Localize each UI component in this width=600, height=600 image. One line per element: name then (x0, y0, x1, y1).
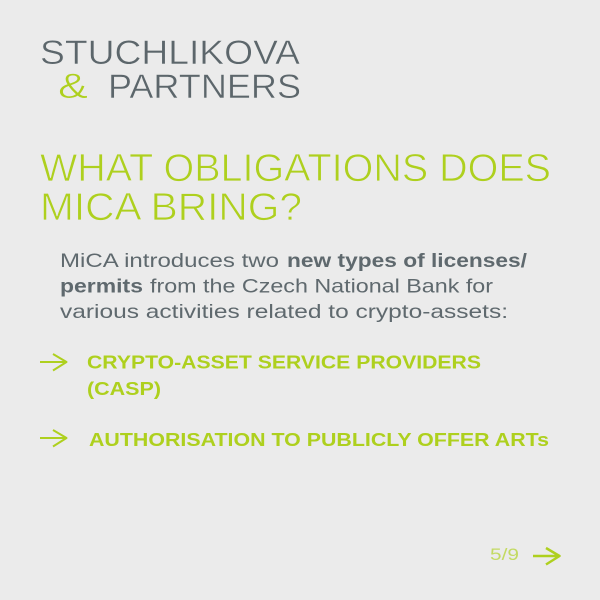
title (40, 147, 551, 229)
logo wordmark line one: STUCHLIKOVA (40, 34, 300, 72)
logo ampersand: & (58, 67, 88, 106)
title: WHAT OBLIGATIONS DOES (40, 147, 551, 190)
list item: CASP: (CASP) (87, 378, 161, 399)
logo wordmark line two: PARTNERS (108, 68, 301, 106)
title: MICA BRING? (40, 186, 302, 229)
page number: 5/9 (490, 545, 519, 564)
arrow: list item two (40, 430, 66, 446)
logo (40, 34, 301, 106)
list item: ARTs: AUTHORISATION TO PUBLICLY OFFER ARTs (89, 429, 549, 450)
intro paragraph: new types of licenses/ (287, 250, 528, 272)
intro paragraph: permits (60, 276, 143, 298)
intro paragraph (60, 250, 528, 323)
intro paragraph: from the Czech National Bank for (150, 276, 494, 298)
list item: CASP: CRYPTO-ASSET SERVICE PROVIDERS (87, 352, 481, 372)
arrow: next page (533, 548, 560, 564)
intro paragraph: MiCA introduces two (60, 250, 279, 272)
intro paragraph: various activities related to crypto-assets: (60, 301, 508, 323)
arrow: list item one (40, 354, 66, 370)
list item: CASP (87, 352, 481, 399)
